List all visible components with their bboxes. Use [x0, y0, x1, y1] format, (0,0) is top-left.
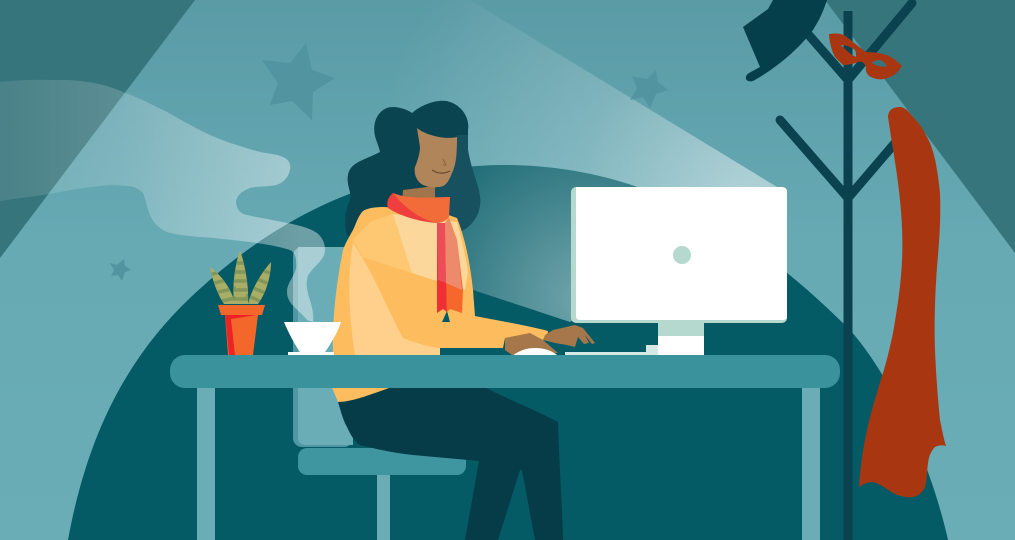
smile	[432, 170, 450, 173]
cup bowl	[284, 322, 341, 352]
monitor back	[576, 187, 787, 320]
scarf tail lit red	[437, 223, 446, 283]
desk leg left	[197, 380, 215, 540]
star: small right	[630, 70, 668, 108]
sweater arm highlight	[349, 243, 440, 356]
nose	[443, 159, 446, 165]
scarf tail red	[437, 223, 447, 313]
hat	[743, 0, 827, 81]
woman	[331, 101, 595, 540]
star: large	[262, 43, 335, 120]
rack lower branches	[780, 120, 895, 198]
pants	[338, 385, 563, 540]
star: tiny left	[110, 259, 131, 281]
left dark spotlight corner	[0, 0, 195, 258]
rack upper left branch	[807, 33, 848, 80]
pot body	[225, 315, 258, 355]
coat rack	[780, 3, 912, 540]
scarf tail orange	[445, 218, 463, 313]
mouse	[512, 348, 558, 356]
monitor logo	[673, 246, 691, 264]
sweater chest light	[393, 214, 468, 290]
plant	[210, 250, 271, 355]
face	[415, 128, 457, 187]
scarf tail	[437, 218, 463, 313]
cape	[859, 107, 946, 497]
sweater	[333, 207, 548, 356]
sweater lower hem	[331, 385, 397, 402]
chair	[293, 247, 466, 540]
monitor	[571, 187, 787, 356]
desk leg right	[802, 380, 820, 540]
keyboard	[565, 345, 660, 356]
mask	[829, 33, 902, 79]
plant leaves	[210, 250, 271, 304]
monitor light beam	[0, 0, 782, 322]
hill	[68, 165, 948, 540]
neck	[402, 186, 435, 205]
chair leg	[377, 470, 390, 540]
saucer	[288, 352, 334, 356]
coffee cup	[284, 322, 341, 356]
light on hill	[462, 165, 637, 322]
chair backrest	[298, 247, 353, 445]
monitor rim	[571, 187, 787, 323]
monitor stand neck	[658, 320, 704, 336]
scarf orange wrap	[393, 193, 450, 223]
pot rim	[218, 305, 265, 315]
forearm gap	[442, 311, 450, 322]
scarf tail lit orange	[445, 218, 462, 290]
pot shadow	[225, 314, 263, 355]
chair backrest rim	[293, 247, 353, 447]
hand on keyboard	[543, 325, 595, 347]
hair	[345, 101, 480, 280]
rack upper right branch	[848, 3, 912, 80]
right dark spotlight corner	[825, 0, 1015, 253]
rack pole	[844, 11, 852, 540]
hair lit side	[430, 135, 480, 250]
sweater shoulder tint	[353, 214, 412, 273]
hand on mouse	[505, 333, 558, 355]
steam from coffee	[0, 80, 325, 322]
leaf stripes	[211, 261, 270, 302]
desk	[170, 355, 840, 540]
monitor stand	[658, 320, 704, 356]
scarf neck	[387, 193, 450, 223]
chair seat	[298, 448, 466, 475]
scarf red fold	[387, 193, 437, 223]
desk top	[170, 355, 840, 388]
